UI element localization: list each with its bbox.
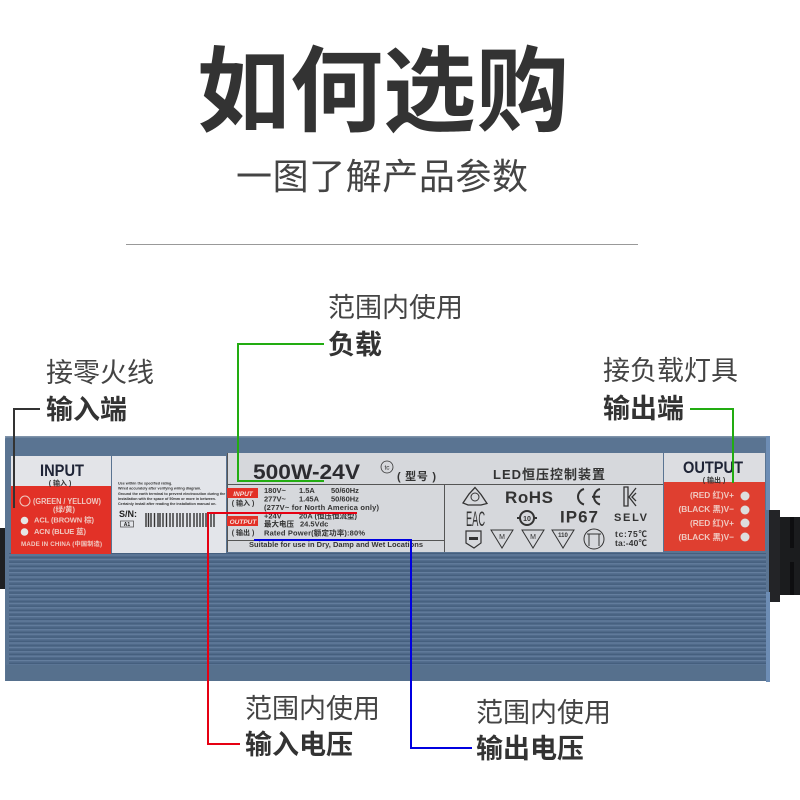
instructions panel: A1 bbox=[124, 522, 130, 528]
ratings: ( 输入 ) bbox=[232, 498, 254, 508]
subtitle: 一图了解产品参数 bbox=[236, 148, 528, 200]
instructions panel: S/N: bbox=[119, 509, 137, 519]
output panel: (RED 红)V+ bbox=[690, 518, 734, 528]
callout: input line bbox=[14, 351, 154, 508]
main label panel: ( 型号 ) bbox=[397, 470, 436, 483]
ratings: 最大电压 bbox=[264, 519, 294, 529]
callout: output voltage bbox=[254, 540, 611, 766]
input panel: (绿/黄) bbox=[53, 504, 76, 514]
output panel: ( 输出 ) bbox=[703, 476, 725, 484]
ratings: 20A (恒压恒流型) bbox=[299, 510, 358, 520]
output panel: (BLACK 黑)V− bbox=[678, 504, 734, 514]
output panel: OUTPUT bbox=[683, 458, 744, 477]
certification marks: M bbox=[530, 534, 536, 541]
instructions panel: Installation with the space of 50mm or more in between. bbox=[118, 497, 216, 501]
casing bbox=[5, 436, 769, 681]
certification marks: 10 bbox=[523, 516, 531, 523]
instructions panel: Wired accurately after verifying wiring diagram. bbox=[118, 486, 201, 490]
right connector bbox=[766, 510, 800, 602]
ratings: 180V~ bbox=[264, 486, 287, 495]
callout: output voltage: 输出电压 bbox=[476, 727, 584, 766]
input panel: ( 输入 ) bbox=[49, 478, 71, 488]
input panel: ACN (BLUE 蓝) bbox=[34, 526, 86, 536]
ratings: OUTPUT bbox=[230, 519, 257, 526]
input panel: MADE IN CHINA (中国制造) bbox=[21, 540, 102, 548]
callout: input voltage bbox=[208, 513, 380, 762]
certification marks: IP67 bbox=[560, 508, 598, 527]
output panel bbox=[664, 453, 765, 551]
callout: input voltage: 输入电压 bbox=[245, 723, 353, 762]
callout: load: 负载 bbox=[328, 323, 382, 362]
certification marks: M bbox=[499, 534, 505, 541]
instructions panel: Certainly install after reading the installation manual on. bbox=[118, 502, 216, 506]
callout: load: 范围内使用 bbox=[328, 286, 463, 325]
instructions panel: Ground the earth terminal to prevent electrocution during the bbox=[118, 492, 225, 496]
instructions panel bbox=[112, 456, 226, 553]
output panel: (RED 红)V+ bbox=[690, 490, 734, 500]
callout: input line: 接零火线 bbox=[46, 351, 154, 390]
input panel: INPUT bbox=[40, 461, 85, 480]
ratings: Suitable for use in Dry, Damp and Wet Locations bbox=[249, 540, 423, 549]
ratings: (277V~ for North America only) bbox=[264, 503, 380, 512]
instructions panel: Use within the specified rating. bbox=[118, 481, 172, 485]
left connector bbox=[0, 528, 9, 589]
ratings: 1.45A bbox=[299, 495, 320, 504]
main label panel: LED恒压控制装置 bbox=[493, 467, 605, 482]
certification marks: 110 bbox=[558, 533, 568, 539]
callout: input voltage: 范围内使用 bbox=[245, 687, 380, 726]
callout: input line: 输入端 bbox=[46, 388, 127, 427]
input panel: ACL (BROWN 棕) bbox=[34, 514, 94, 524]
ratings: 50/60Hz bbox=[331, 495, 359, 504]
ratings: INPUT bbox=[233, 491, 254, 498]
power supply device bbox=[5, 436, 770, 682]
input panel: (GREEN / YELLOW) bbox=[33, 497, 101, 506]
ratings: 1.5A bbox=[299, 486, 315, 495]
output panel: (BLACK 黑)V− bbox=[678, 532, 734, 542]
certification marks: EAC bbox=[466, 508, 485, 531]
certification marks bbox=[463, 487, 648, 549]
heat sink fins bbox=[9, 553, 766, 665]
certification marks: tc:75℃ bbox=[615, 529, 647, 539]
ratings bbox=[227, 486, 423, 549]
callout: output to lamp: 输出端 bbox=[603, 387, 684, 426]
barcode bbox=[146, 513, 214, 527]
main label panel: tc bbox=[384, 464, 390, 472]
title: 如何选购 bbox=[197, 16, 569, 151]
certification marks: SELV bbox=[614, 512, 648, 524]
ratings: +24V bbox=[264, 512, 282, 520]
ratings: 24.5Vdc bbox=[300, 520, 328, 529]
callout: output voltage: 范围内使用 bbox=[476, 691, 611, 730]
callout: load bbox=[238, 286, 463, 481]
main label panel: 500W-24V bbox=[253, 461, 360, 484]
certification marks: RoHS bbox=[505, 488, 553, 507]
ratings: ( 输出 ) bbox=[232, 528, 254, 537]
certification marks: ta:-40℃ bbox=[615, 538, 647, 548]
ratings: Rated Power(额定功率):80% bbox=[264, 528, 365, 538]
callout: output to lamp bbox=[603, 349, 738, 483]
main label panel bbox=[227, 453, 663, 552]
ratings: 50/60Hz bbox=[331, 486, 359, 495]
input panel bbox=[11, 456, 111, 554]
ratings: 277V~ bbox=[264, 495, 287, 504]
callout: output to lamp: 接负载灯具 bbox=[603, 349, 738, 388]
